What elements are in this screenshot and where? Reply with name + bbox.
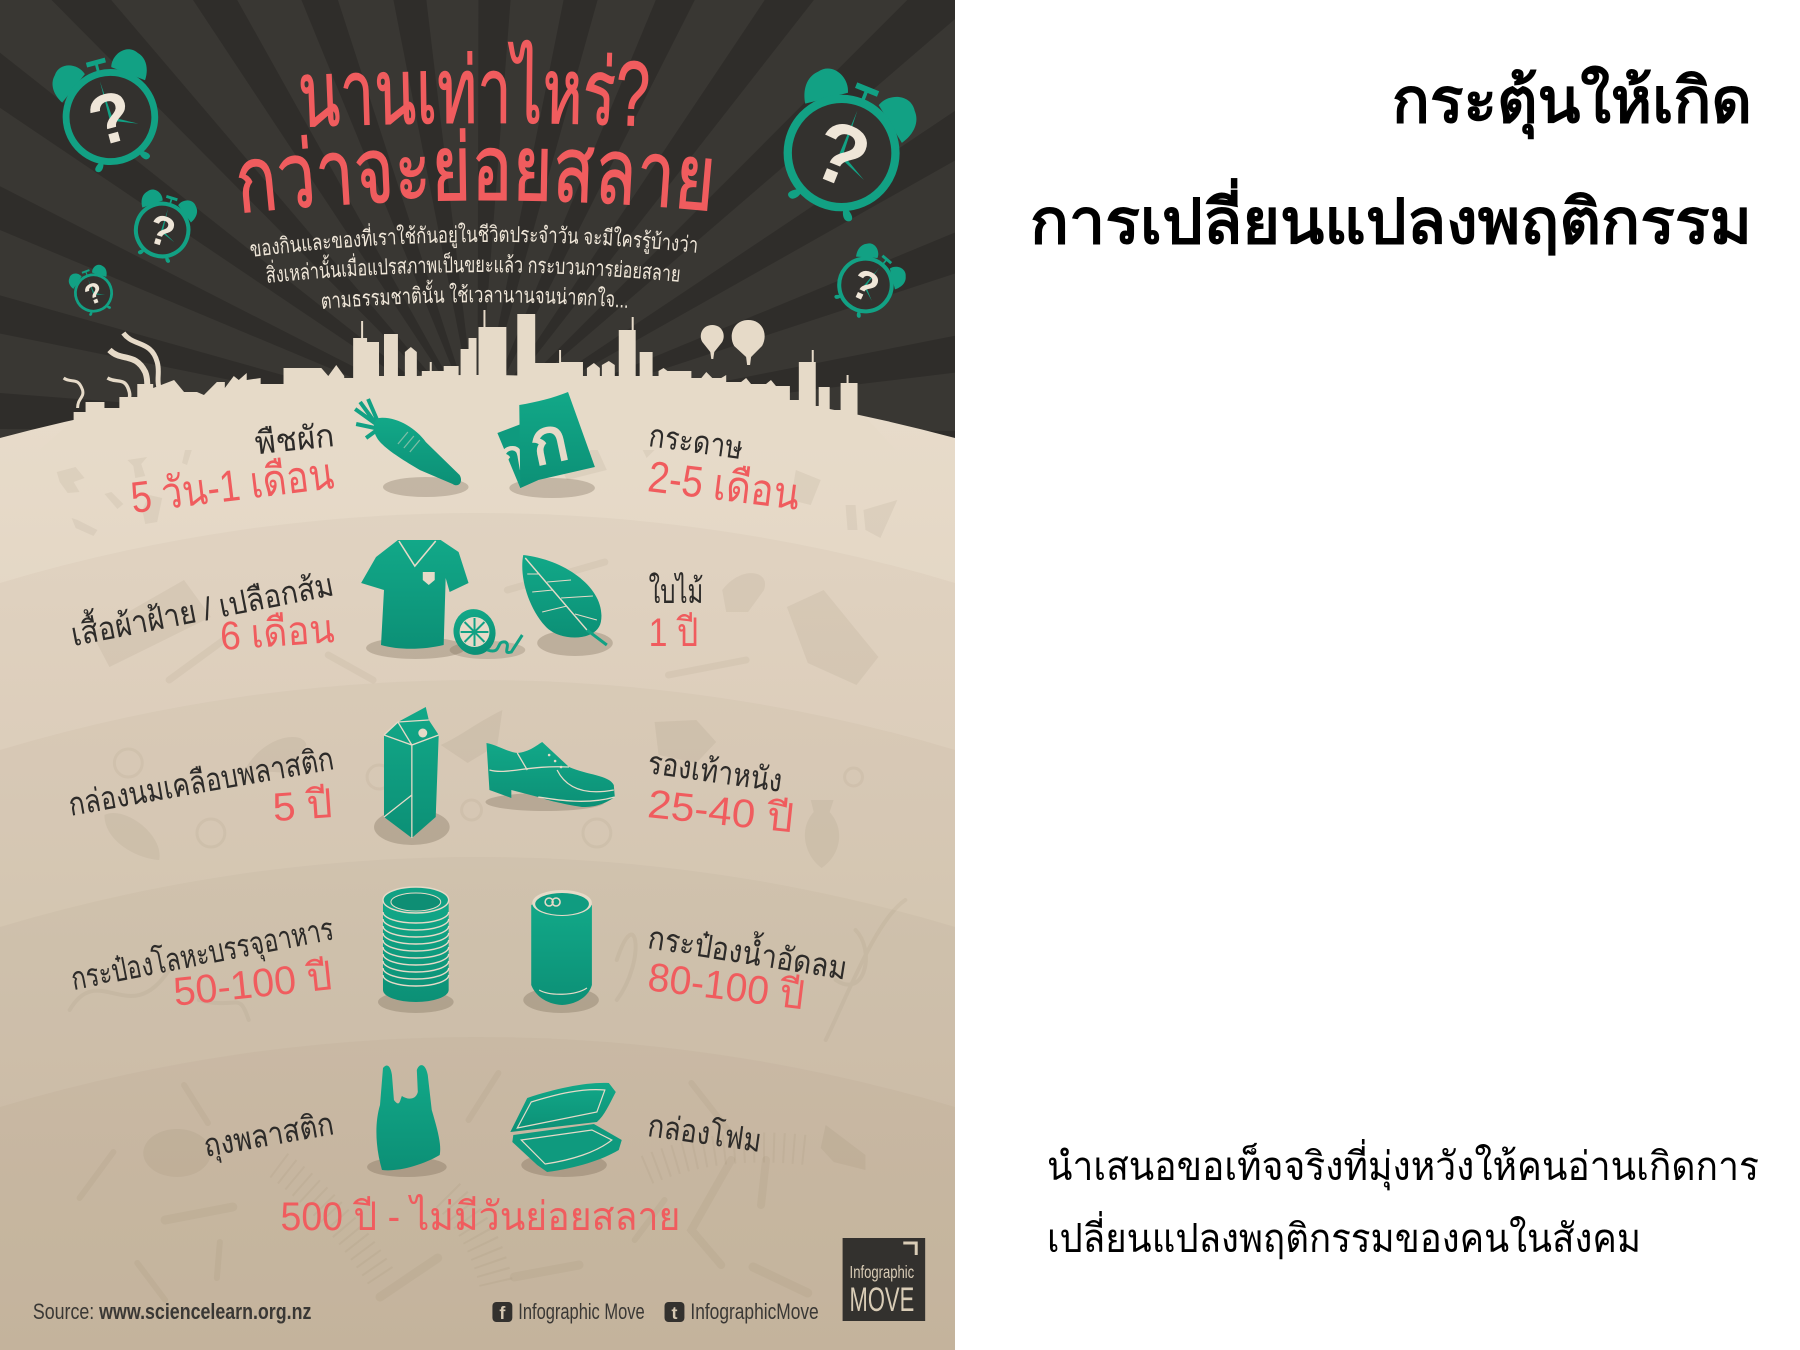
twitter credit: t <box>671 1303 677 1323</box>
source credit: Source: www.sciencelearn.org.nz <box>33 1299 311 1324</box>
title: นานเท่าไหร่? <box>300 40 648 127</box>
label: leaf: 1 ปี <box>649 611 698 655</box>
logo: Infographic Move: Infographic <box>850 1262 914 1282</box>
faded buried objects <box>57 415 897 1177</box>
label: paper: 2-5 เดือน <box>645 452 802 520</box>
twitter credit: InfographicMove <box>690 1299 819 1324</box>
label: plastic bag: ถุงพลาสติก <box>201 1105 337 1166</box>
item: cotton shirt and orange peel <box>67 540 525 660</box>
label: leaf: ใบไม้ <box>649 572 703 611</box>
label: food can: 50-100 ปี <box>171 954 334 1015</box>
item: foam box <box>510 1083 764 1177</box>
label: vegetables <box>128 417 336 523</box>
item: leaf <box>522 555 703 656</box>
clock icon small right: ? <box>844 259 887 312</box>
poster content <box>33 40 926 1324</box>
label: foam box: กล่องโฟม <box>646 1107 764 1159</box>
faded vase left <box>104 813 160 860</box>
intro text: ตามธรรมชาตินั้น ใช้เวลานานจนน่าตกใจ... <box>322 280 627 309</box>
conclusion text: 500 ปี - ไม่มีวันย่อยสลาย <box>281 1194 680 1239</box>
clock icon small left: ? <box>80 276 108 312</box>
heading: กระตุ้นให้เกิด <box>1392 65 1752 139</box>
description: นำเสนอขอเท็จจริงที่มุ่งหวังให้คนอ่านเกิดการ <box>1047 1139 1759 1191</box>
title <box>238 40 712 213</box>
item: paper: ก <box>523 404 574 480</box>
label: vegetables: 5 วัน-1 เดือน <box>128 449 336 523</box>
faded skull <box>722 573 765 612</box>
item: paper <box>495 392 802 520</box>
label: soda can: กระป๋องน้ำอัดลม <box>646 914 850 987</box>
label: leaf <box>649 572 703 655</box>
item: paper: ก <box>495 430 528 481</box>
faded coffin right <box>787 590 878 685</box>
clock icon large right: ? <box>799 101 883 209</box>
clock icon large left <box>48 45 170 178</box>
faded vase right <box>805 800 839 868</box>
label: paper <box>645 417 802 520</box>
item: food can <box>68 887 454 1015</box>
item: leather shoe <box>485 742 796 841</box>
label: milk carton <box>66 740 336 830</box>
description <box>1047 1139 1759 1261</box>
logo: Infographic Move: MOVE <box>850 1281 914 1319</box>
facebook credit: Infographic Move <box>518 1299 645 1324</box>
description: เปลี่ยนแปลงพฤติกรรมของคนในสังคม <box>1047 1211 1641 1261</box>
label: vegetables: พืชผัก <box>253 417 336 461</box>
faded skull right <box>821 1125 865 1170</box>
label: food can <box>68 910 337 1015</box>
intro text <box>250 222 697 309</box>
item: milk carton <box>66 707 450 845</box>
city skyline silhouette <box>40 310 895 450</box>
title: กว่าจะย่อยสลาย <box>238 128 712 213</box>
heading <box>1030 65 1752 257</box>
clock icon medium left: ? <box>143 204 181 257</box>
clock icon small right <box>825 239 910 326</box>
label: soda can: 80-100 ปี <box>646 955 807 1018</box>
item: plastic bag <box>201 1065 447 1177</box>
item: soda can <box>523 890 850 1018</box>
clock icon medium left <box>126 187 200 267</box>
poster background <box>0 0 955 1350</box>
clock icon small left <box>67 263 119 319</box>
facebook credit <box>492 1299 645 1324</box>
factory smoke <box>64 333 159 410</box>
label: leather shoe: 25-40 ปี <box>646 782 796 841</box>
label: milk carton: 5 ปี <box>271 782 334 830</box>
faded bones and rings <box>70 562 905 1300</box>
clock icon large right <box>765 62 923 232</box>
intro text: ของกินและของที่เราใช้กันอยู่ในชีวิตประจำวัน จะมีใครรู้บ้างว่า <box>250 222 697 256</box>
faded coffin left <box>92 580 211 667</box>
label: cotton shirt and orange peel: เสื้อผ้าฝ้าย / เปลือกส้ม <box>67 562 337 653</box>
faded skull left <box>143 1129 211 1177</box>
logo: Infographic Move <box>843 1238 925 1321</box>
twitter credit <box>665 1299 819 1324</box>
label: paper: กระดาษ <box>647 417 745 466</box>
clock icon large left: ? <box>80 74 142 162</box>
facebook credit: f <box>499 1303 506 1323</box>
label: milk carton: กล่องนมเคลือบพลาสติก <box>66 740 336 823</box>
label: soda can <box>646 914 850 1018</box>
balloons <box>701 320 765 365</box>
label: leather shoe: รองเท้าหนัง <box>646 744 785 799</box>
label: cotton shirt and orange peel: 6 เดือน <box>219 607 336 659</box>
label: food can: กระป๋องโลหะบรรจุอาหาร <box>68 910 337 999</box>
label: leather shoe <box>646 744 796 841</box>
intro text: สิ่งเหล่านั้นเมื่อแปรสภาพเป็นขยะแล้ว กระบวนการย่อยสลาย <box>266 252 680 283</box>
item: vegetables <box>128 399 469 523</box>
heading: การเปลี่ยนแปลงพฤติกรรม <box>1030 178 1752 257</box>
